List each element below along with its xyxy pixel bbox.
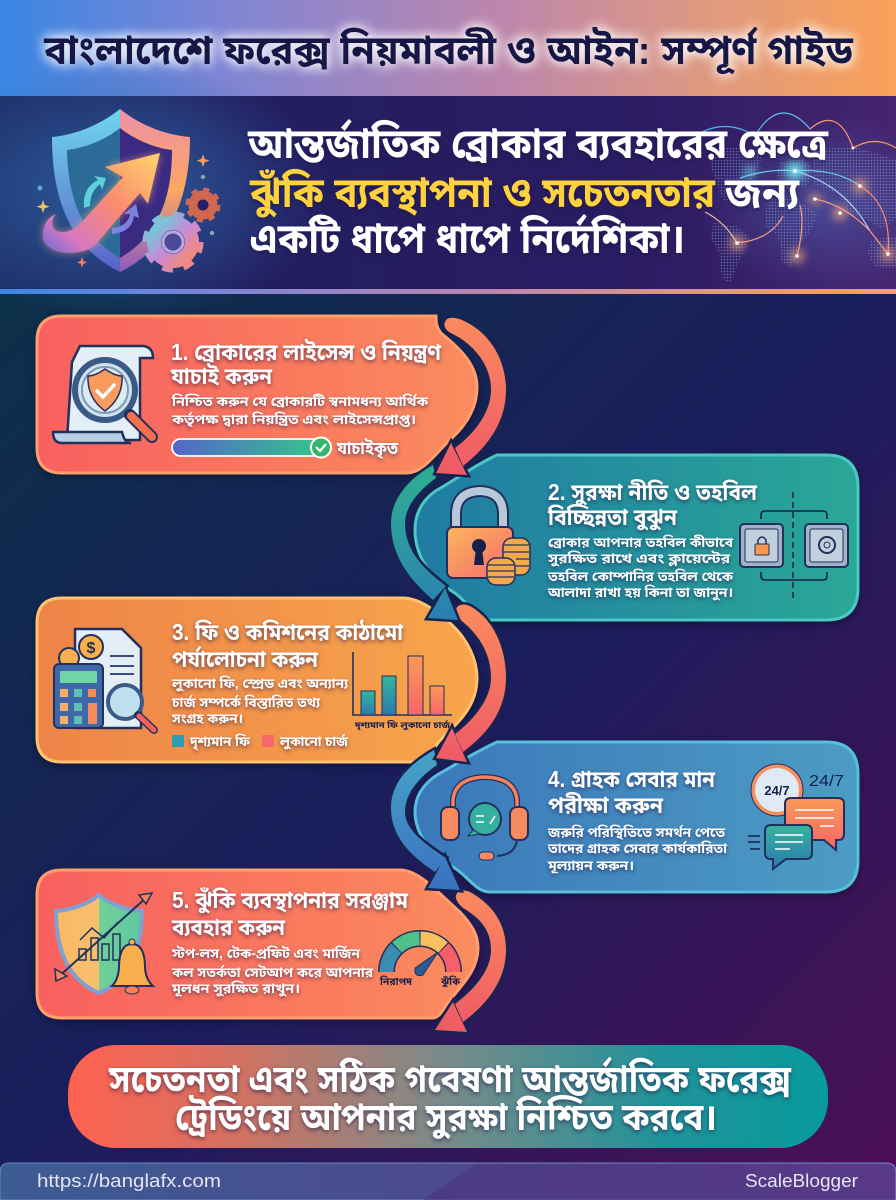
icon: padlock and coins: [447, 491, 530, 585]
arrow: step 4 to step 5: [391, 750, 460, 890]
panel: step 4 support: [415, 742, 858, 892]
text block: আলাদা রাখা হয় কিনা তা জানুন।: [547, 584, 733, 601]
closing banner: সচেতনতা এবং সঠিক গবেষণা আন্তর্জাতিক ফরেক্স: [108, 1057, 792, 1101]
text block: লুকানো ফি, স্প্রেড এবং অন্যান্য: [171, 675, 348, 692]
icon: calculator with document and magnifier: [54, 629, 154, 730]
panel: step 5 risk tools: [37, 870, 478, 1018]
legend: লুকানো চার্জ: [279, 732, 349, 750]
heading: 4. গ্রাহক সেবার মান: [548, 766, 716, 792]
arrow: step 3 to step 4: [436, 604, 506, 762]
text block: সংগ্রহ করুন।: [171, 711, 243, 726]
text block: সুরক্ষিত রাখে এবং ক্লায়েন্টের: [547, 550, 731, 567]
heading: পরীক্ষা করুন: [548, 791, 664, 818]
text block: কর্তৃপক্ষ দ্বারা নিয়ন্ত্রিত এবং লাইসেন্সপ্রাপ্ত।: [171, 410, 416, 429]
icon: shield, chart and bell: [55, 893, 153, 994]
text block: চার্জ সম্পর্কে বিস্তারিত তথ্য: [171, 693, 320, 710]
icon: shield with arrow and gears: [36, 109, 218, 272]
heading: [548, 766, 716, 818]
hero world map with network: [700, 113, 896, 283]
footer: [0, 1163, 896, 1200]
icon: calculator with document and magnifier: $: [87, 640, 96, 657]
closing banner: [68, 1045, 828, 1148]
footer: https://banglafx.com: [37, 1171, 221, 1191]
text block: মূলধন সুরক্ষিত রাখুন।: [171, 980, 300, 997]
heading: [171, 886, 409, 940]
hero panel: [0, 60, 896, 320]
closing banner: ট্রেডিংয়ে আপনার সুরক্ষা নিশ্চিত করবে।: [175, 1095, 717, 1140]
text block: নিশ্চিত করুন যে ব্রোকারটি স্বনামধন্য আর্থিক: [171, 392, 429, 409]
text block: তাদের গ্রাহক সেবার কার্যকারিতা: [547, 839, 727, 856]
arrow: step 5 to closing banner: [435, 890, 506, 1032]
heading: 2. সুরক্ষা নীতি ও তহবিল: [548, 478, 758, 506]
verified progress bar: যাচাইকৃত: [336, 438, 399, 459]
icon: headset with chat bubble: [441, 777, 528, 860]
text block: [171, 675, 348, 726]
hero text: একটি ধাপে ধাপে নির্দেশিকা।: [250, 213, 685, 262]
footer: ScaleBlogger: [745, 1171, 858, 1191]
text block: স্টপ-লস, টেক-প্রফিট এবং মার্জিন: [171, 944, 361, 961]
bar chart: [353, 652, 452, 731]
heading: 5. ঝুঁকি ব্যবস্থাপনার সরঞ্জাম: [172, 886, 409, 914]
text block: [171, 944, 374, 997]
icon: 24/7 clock and chat bubbles: 24/7: [764, 783, 790, 798]
title banner: [0, 0, 896, 96]
hero text: আন্তর্জাতিক ব্রোকার ব্যবহারের ক্ষেত্রে: [247, 118, 829, 167]
panel: step 2 security: [415, 455, 858, 620]
bar chart: দৃশ্যমান ফি লুকানো চার্জ: [354, 719, 451, 731]
panel: step 1 license: [37, 316, 477, 473]
hero text: ঝুঁকি ব্যবস্থাপনা ও সচেতনতার: [249, 168, 716, 218]
legend: [172, 732, 349, 751]
text block: কল সতর্কতা সেটআপ করে আপনার: [171, 963, 374, 980]
text block: [547, 823, 727, 874]
verified progress bar: [172, 438, 399, 459]
heading: [547, 478, 758, 531]
panel: step 3 fees: [37, 598, 477, 762]
text block: তহবিল কোম্পানির তহবিল থেকে: [547, 568, 734, 584]
gauge chart: ঝুঁকি: [440, 976, 461, 988]
arrow: step 1 to step 2: [436, 318, 506, 475]
icon: 24/7 clock and chat bubbles: [748, 764, 844, 869]
heading: [170, 338, 442, 389]
heading: পর্যালোচনা করুন: [172, 645, 319, 672]
heading: ব্যবহার করুন: [171, 914, 286, 940]
page background: [0, 290, 896, 1200]
text block: ব্রোকার আপনার তহবিল কীভাবে: [548, 534, 734, 550]
arrow: step 2 to step 3: [391, 465, 458, 620]
heading: 1. ব্রোকারের লাইসেন্স ও নিয়ন্ত্রণ: [171, 338, 442, 365]
heading: 3. ফি ও কমিশনের কাঠামো: [172, 618, 403, 645]
hero text: [247, 118, 829, 262]
text block: [547, 534, 734, 601]
icon: separated safes: [740, 492, 848, 600]
heading: বিচ্ছিন্নতা বুঝুন: [547, 503, 678, 531]
gauge chart: নিরাপদ: [379, 976, 412, 988]
legend: দৃশ্যমান ফি: [189, 733, 251, 751]
heading: যাচাই করুন: [170, 362, 273, 389]
text block: জরুরি পরিস্থিতিতে সমর্থন পেতে: [547, 823, 726, 840]
icon: 24/7 clock and chat bubbles: 24/7: [809, 773, 844, 790]
hero text: জন্য: [724, 169, 800, 216]
text block: [171, 392, 429, 429]
text block: মূল্যায়ন করুন।: [547, 858, 634, 874]
gauge chart: [379, 938, 461, 988]
icon: license document with magnifier: [53, 346, 153, 443]
title: বাংলাদেশে ফরেক্স নিয়মাবলী ও আইন: সম্পূর্ণ গাইড: [43, 27, 854, 74]
heading: [172, 618, 403, 672]
